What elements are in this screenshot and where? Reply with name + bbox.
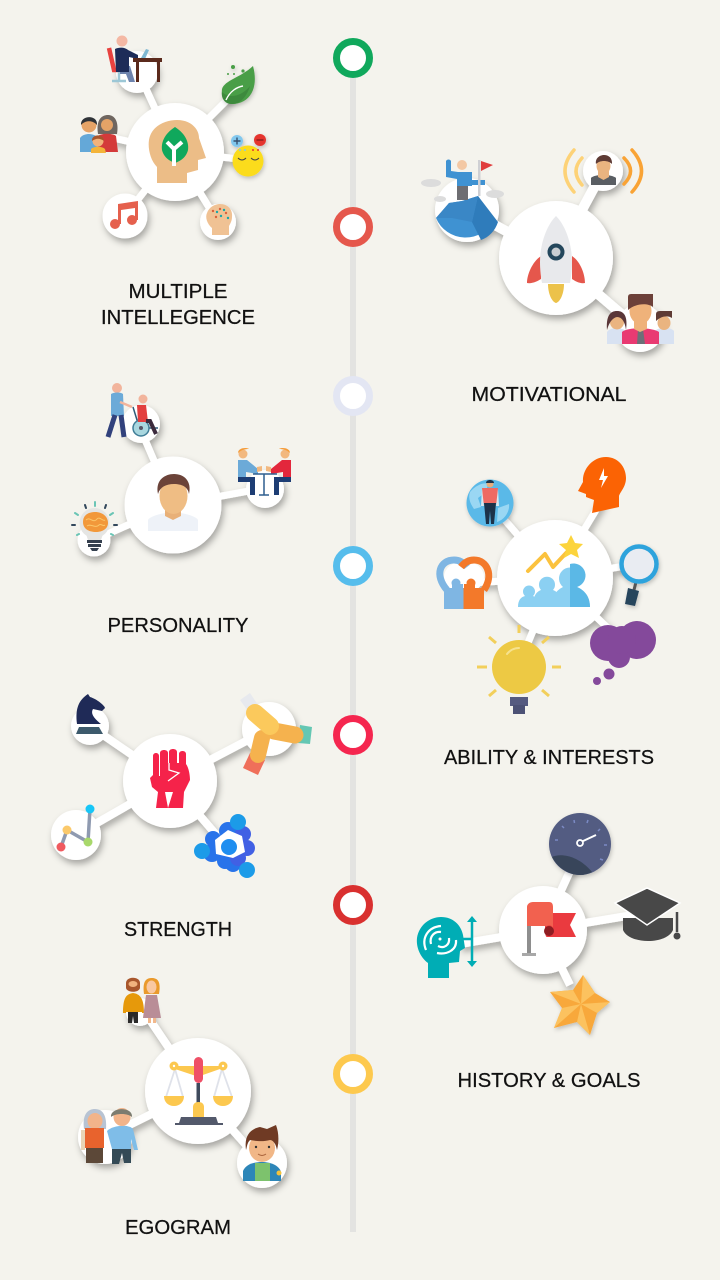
panel: strength — [51, 693, 312, 941]
icon: boy — [243, 1125, 282, 1181]
icon: flag — [522, 902, 576, 956]
icon: orange head with bolt — [578, 457, 626, 513]
icon: family — [80, 115, 118, 153]
icon: people at table — [238, 448, 291, 495]
icon: portrait — [148, 474, 198, 531]
icon: brain bulb — [72, 502, 117, 551]
icon: broadcasting person — [565, 150, 642, 192]
icon: emotion face — [231, 134, 266, 176]
heading: egogram: EGOGRAM — [125, 1217, 231, 1239]
icon: magnifier — [622, 546, 656, 606]
icon: thought cloud — [590, 621, 656, 685]
timeline node: green — [336, 42, 370, 74]
panel: personality — [72, 383, 291, 637]
panel: ability and interests — [440, 457, 656, 769]
icon: line chart — [56, 804, 94, 852]
timeline node: coral — [336, 210, 370, 244]
heading: strength: STRENGTH — [124, 919, 232, 941]
timeline — [336, 42, 370, 1232]
heading: ability and interests: ABILITY & INTERESTS — [444, 747, 654, 769]
icon: graduation cap — [615, 888, 680, 941]
heading: history and goals: HISTORY & GOALS — [458, 1070, 640, 1092]
icon: young couple — [123, 978, 161, 1023]
icon: person at desk — [109, 36, 162, 82]
timeline node: blue — [336, 550, 370, 582]
icon: elderly couple — [81, 1108, 138, 1164]
icon: leaf — [222, 65, 255, 104]
icon: balance scale — [164, 1057, 233, 1125]
icon: light bulb — [477, 625, 561, 714]
timeline node: red — [336, 888, 370, 922]
icon: music note — [110, 201, 138, 229]
heading: personality: PERSONALITY — [108, 615, 248, 637]
icon: rocket — [527, 216, 585, 303]
icon: joined hands — [240, 693, 312, 775]
icon: people in heart — [440, 560, 489, 609]
icon: fist — [150, 749, 190, 808]
panel: motivational — [421, 150, 674, 406]
icon: gauge — [549, 813, 611, 875]
heading: multiple intellegence: MULTIPLE — [128, 281, 228, 303]
timeline node: lavender — [336, 380, 370, 412]
icon: head with leaf — [149, 120, 206, 183]
panel: history and goals — [417, 813, 680, 1092]
icon: wheelchair carer — [108, 383, 158, 437]
icon: mountain climber — [421, 160, 504, 240]
icon: teal head with arrow — [417, 916, 477, 978]
icon: star — [550, 975, 610, 1035]
icon: globe with person — [466, 480, 514, 526]
icon: gear — [194, 814, 255, 878]
timeline node: yellow — [336, 1058, 370, 1090]
heading: multiple intellegence — [101, 281, 255, 329]
icon: brain head — [206, 204, 232, 235]
icon: team — [607, 294, 674, 344]
icon: rising people chart — [518, 535, 590, 607]
panel: multiple intelligence — [80, 36, 266, 329]
heading: motivational: MOTIVATIONAL — [472, 384, 626, 406]
timeline node: crimson — [336, 718, 370, 752]
icon: chess knight — [76, 694, 105, 734]
panel: egogram — [78, 978, 287, 1239]
heading: multiple intellegence: INTELLEGENCE — [101, 307, 255, 329]
